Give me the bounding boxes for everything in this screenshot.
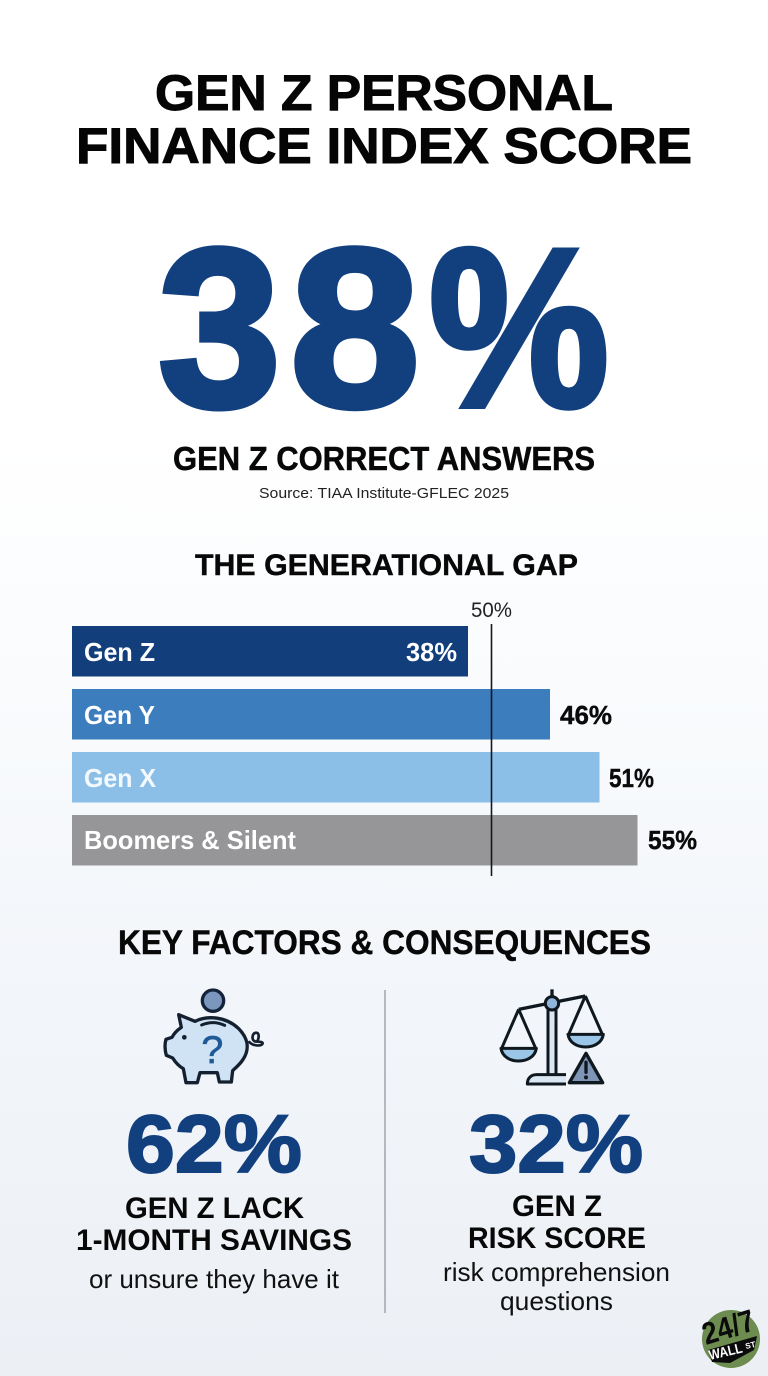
note: or unsure: or unsure they have it: [89, 1264, 340, 1294]
note: risk comprehension questions: questions: [500, 1286, 613, 1316]
note: risk comprehension questions: [443, 1257, 670, 1316]
headline stat: 38%: [158, 201, 609, 454]
bar: Gen Z: Gen Z: [84, 637, 155, 667]
panel: risk consequence: [443, 989, 670, 1316]
icon: piggy bank with question mark: [165, 990, 263, 1083]
icon: piggy bank with question mark: ?: [201, 1028, 223, 1072]
logo: 24/7 Wall St: 24/7: [698, 1303, 759, 1352]
title: FINANCE INDEX SCORE: [76, 118, 692, 174]
logo: 24/7 Wall St: [698, 1303, 760, 1368]
stat: 32%: 32%: [469, 1099, 643, 1190]
logo: 24/7 Wall St: ST: [744, 1340, 757, 1351]
label: gen z risk score: GEN Z: [512, 1190, 602, 1223]
bar chart: generational scores: [72, 599, 697, 876]
bar: Gen X: 51%: [609, 763, 654, 793]
bar: Gen X: Gen X: [84, 763, 157, 793]
icon: balance scale with warning sign: [501, 989, 603, 1084]
label: lack 1-month savings: 1-MONTH SAVINGS: [76, 1224, 352, 1257]
heading: key factors and consequences: KEY FACTORS & CONSEQUENCES: [118, 924, 651, 962]
label: gen z risk score: RISK SCORE: [468, 1222, 646, 1255]
headline stat: 38%: 3: [158, 201, 281, 454]
stat: 62%: 62%: [126, 1099, 302, 1190]
bar: Gen Y: [72, 689, 612, 740]
bar: Boomers and Silent: 55%: [648, 825, 697, 855]
bar: Gen Z: [72, 626, 468, 676]
title: GEN Z PERSONAL: [155, 65, 613, 121]
heading: the generational gap: THE GENERATIONAL GAP: [195, 549, 578, 582]
panel: savings factor: [76, 990, 352, 1294]
label: gen z risk score: [468, 1190, 646, 1255]
bar: Gen Y: Gen Y: [84, 700, 155, 730]
label: lack 1-month savings: [76, 1192, 352, 1257]
logo: 24/7 Wall St: WALL: [707, 1340, 744, 1363]
bar: Boomers and Silent: [72, 815, 697, 866]
headline stat: 38%: 8: [290, 201, 420, 454]
label: lack 1-month savings: GEN Z LACK: [125, 1192, 304, 1225]
headline stat: 38%: %: [429, 201, 609, 454]
note: risk comprehension questions: risk comprehension: [443, 1257, 670, 1287]
bar: Gen Y: 46%: [560, 700, 612, 730]
bar: Boomers and Silent: Boomers & Silent: [84, 825, 296, 855]
bar: Gen X: [72, 752, 654, 802]
bar: Gen Z: 38%: [406, 637, 457, 667]
panel divider: [384, 990, 386, 1313]
source note: Source: TIAA Institute-GFLEC 2025: [259, 485, 509, 502]
headline caption: GEN Z CORRECT ANSWERS: [173, 440, 595, 477]
title: [76, 65, 692, 174]
reference line: 50%: 50%: [471, 599, 512, 622]
